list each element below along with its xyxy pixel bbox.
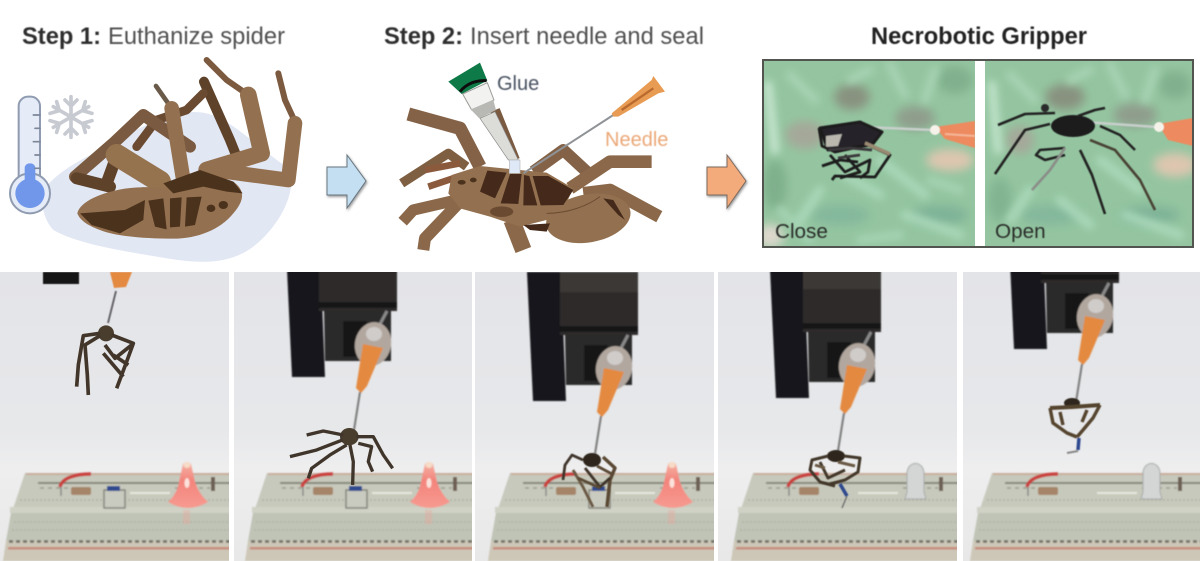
mount and syringe <box>770 269 881 451</box>
heading: step 2: Insert needle and seal <box>470 24 704 50</box>
mount and syringe <box>43 272 132 323</box>
spider body <box>77 170 242 239</box>
mount and syringe <box>1008 220 1119 402</box>
heading: necrobotic gripper: Necrobotic Gripper <box>871 24 1087 50</box>
illustration: step 2 insert needle and seal <box>402 63 665 250</box>
label: glue: Glue <box>497 73 539 95</box>
photo frame <box>763 60 1193 247</box>
syringe <box>864 121 975 148</box>
heading: step 1 <box>22 24 285 50</box>
photo 5: gripper carrying switch away <box>963 272 1200 561</box>
photo 4: gripper lifting switch, LED off <box>718 272 957 561</box>
heading: step 2: Step 2: <box>384 24 463 50</box>
spider <box>563 453 615 507</box>
open spider <box>995 104 1155 214</box>
heading: step 1: Step 1: <box>22 24 101 50</box>
icon: snowflake <box>50 97 92 137</box>
cold blob background <box>42 112 291 262</box>
photo: open <box>985 61 1192 246</box>
spider gripping switch <box>810 450 860 508</box>
label: close: Close <box>775 220 828 243</box>
spider carrying switch <box>1050 398 1100 453</box>
glue bottle <box>448 63 520 173</box>
label: needle: Needle <box>605 129 668 151</box>
illustration: step 1 euthanize spider <box>10 60 295 262</box>
photo 3: gripper closing on switch <box>475 272 714 561</box>
photo 2: gripper open over switch <box>234 272 472 561</box>
photo: close <box>764 61 975 246</box>
spider legs <box>402 110 659 250</box>
mount and syringe <box>286 248 397 430</box>
arrow: orange <box>707 155 746 208</box>
icon: thermometer <box>10 97 50 213</box>
heading: step 1: Euthanize spider <box>108 24 285 50</box>
syringe <box>1085 118 1193 146</box>
mount and syringe <box>527 272 638 454</box>
needle <box>523 76 665 173</box>
spider body <box>448 166 573 227</box>
label: open: Open <box>995 220 1046 243</box>
closed spider <box>819 122 890 180</box>
spider <box>290 428 393 485</box>
arrow: blue <box>327 155 366 208</box>
photo 1: gripper descending <box>0 272 229 561</box>
spider legs <box>75 60 295 187</box>
photo panel: necrobotic gripper <box>756 60 1197 248</box>
spider <box>77 325 133 395</box>
